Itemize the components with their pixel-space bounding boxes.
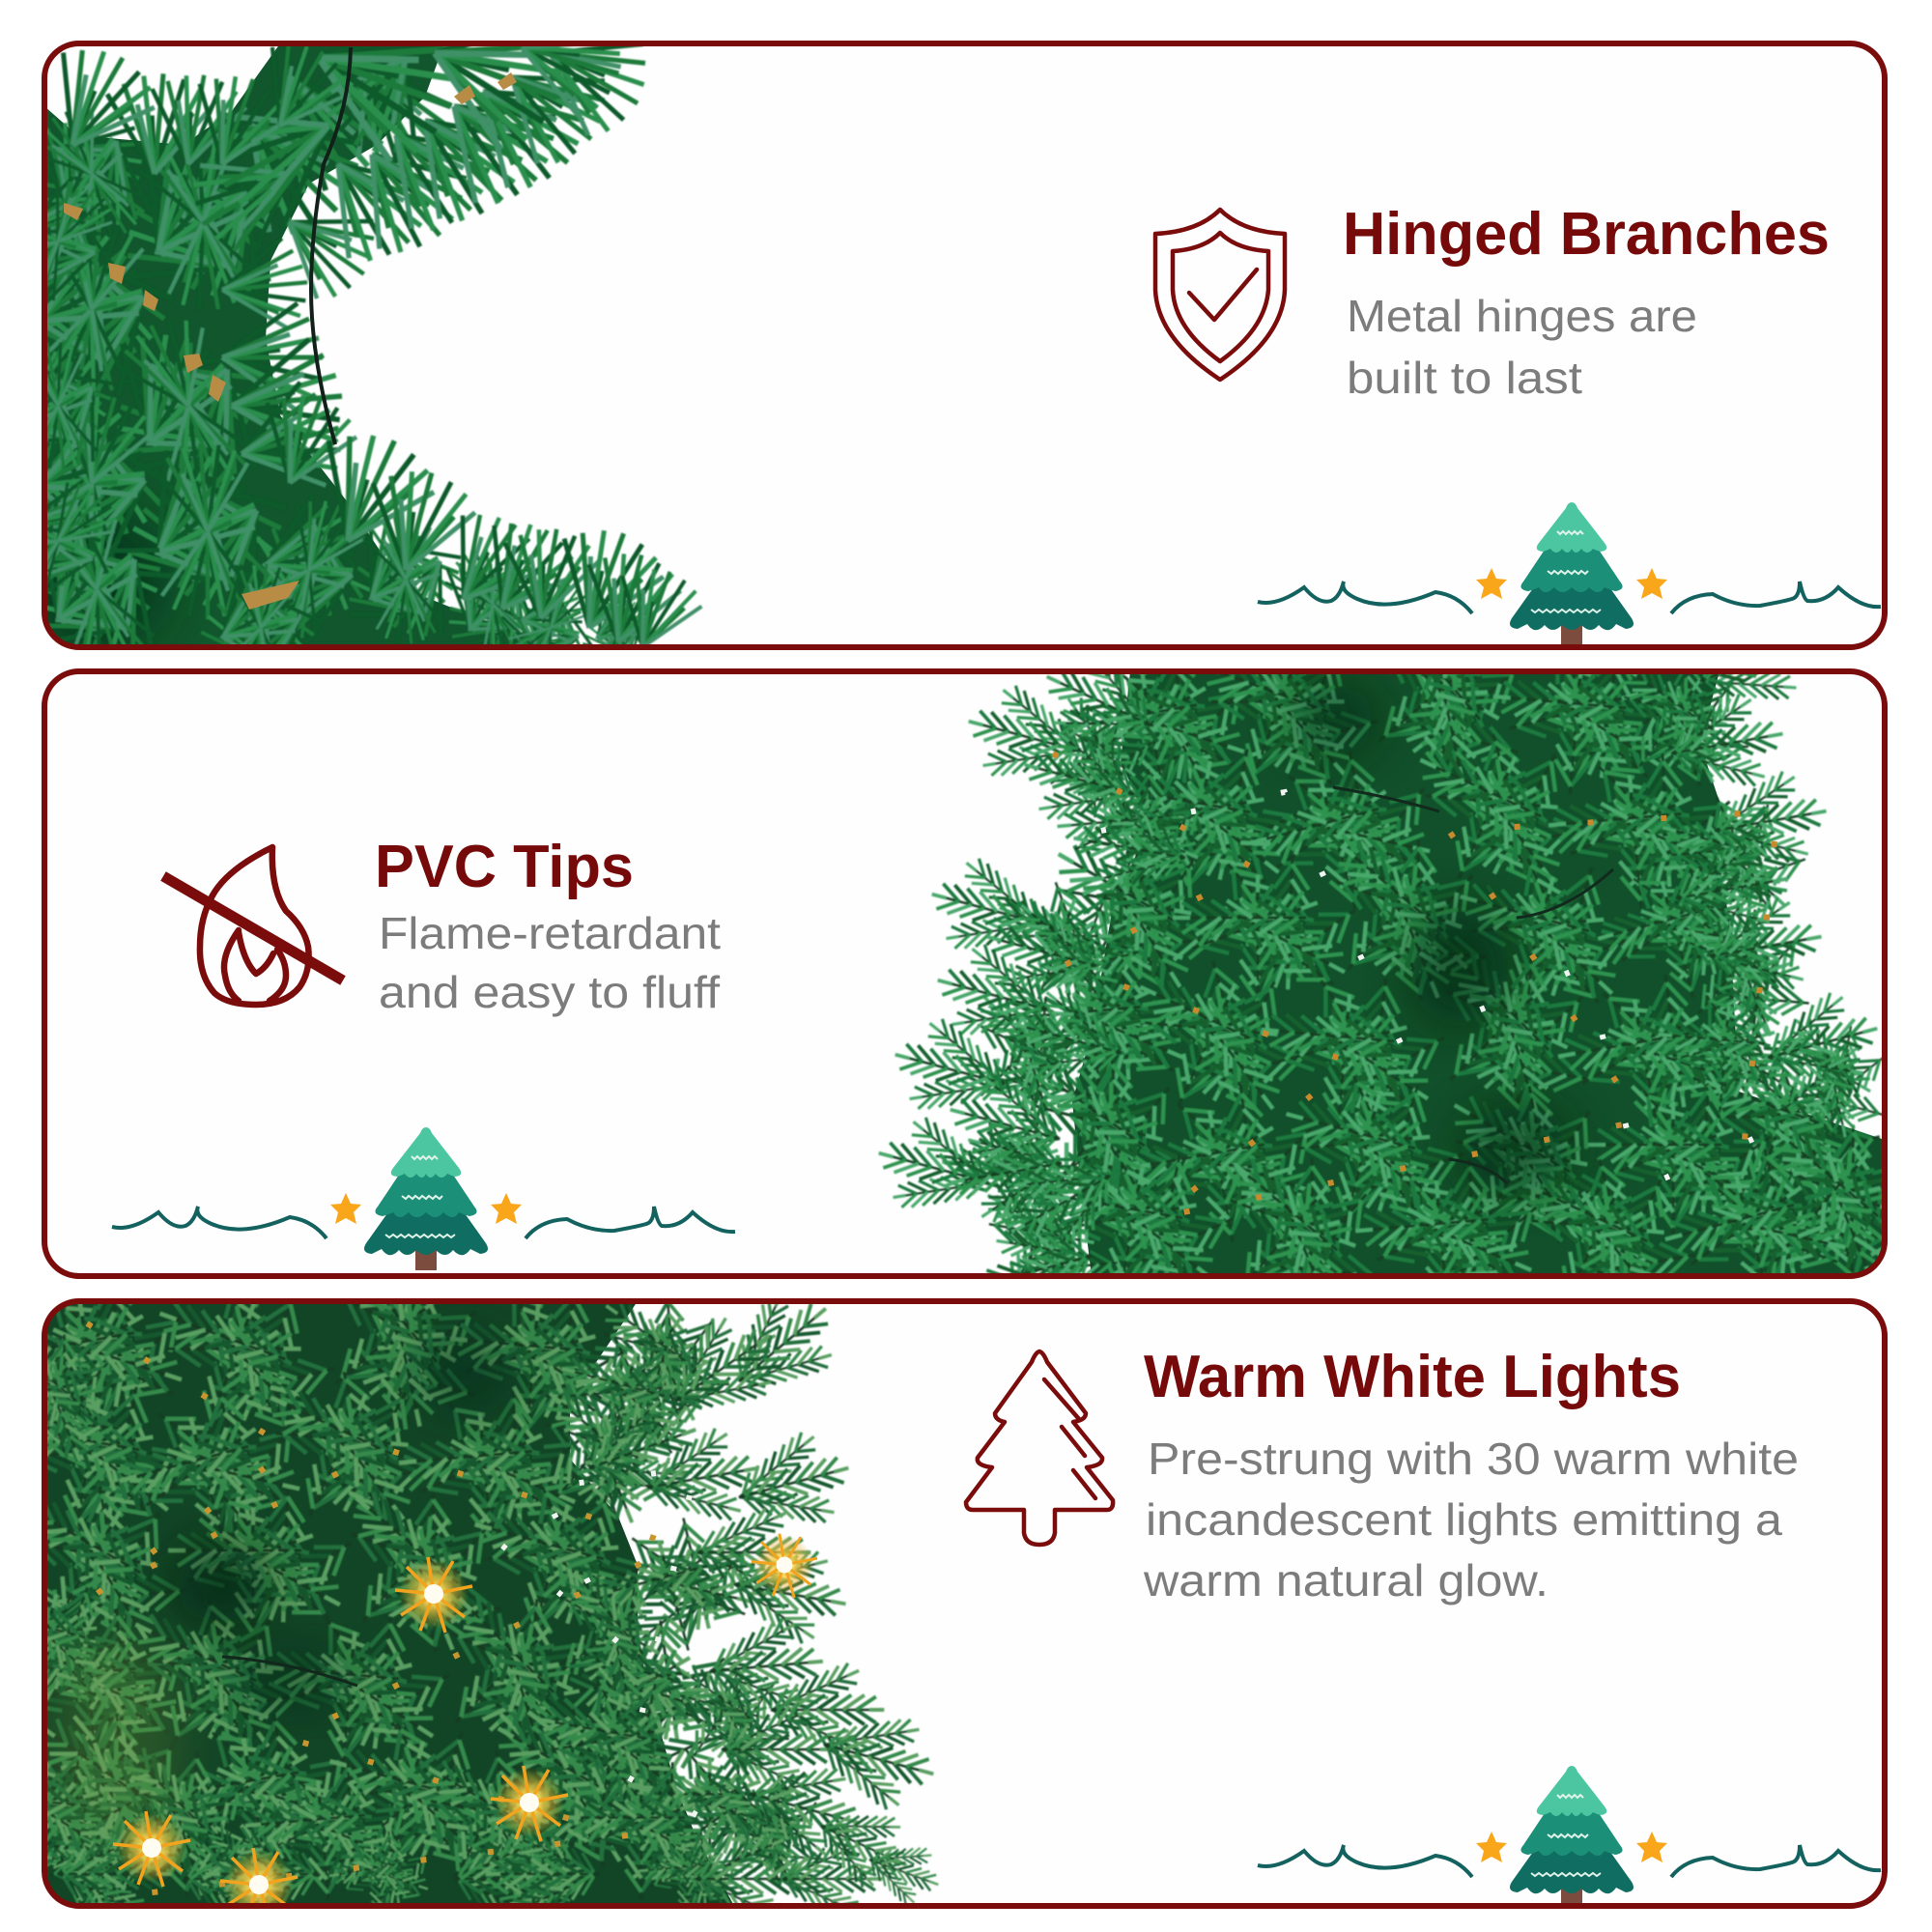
body text [1347,291,1697,403]
body text [1143,1434,1799,1605]
heading: Warm White Lights [1144,1344,1681,1410]
heading: PVC Tips [375,834,634,900]
icon: tree outline [966,1351,1113,1545]
body text: Pre-strung with 30 warm white [1148,1434,1799,1484]
panel: PVC tips [112,674,1882,1273]
body text: built to last [1347,353,1582,403]
body text [379,908,721,1017]
photo: spruce tree [877,674,1882,1273]
body text: warm natural glow. [1143,1555,1548,1605]
photo: pine branches [47,46,703,644]
lights [113,1534,817,1923]
panel: hinged branches [47,46,1882,644]
icon: no flame [163,847,343,1005]
decoration: tree, stars and garland [1258,1766,1881,1909]
icon: shield with check [1155,210,1285,380]
decoration: tree, stars and garland [1258,502,1881,645]
body text: incandescent lights emitting a [1146,1494,1782,1545]
body text: Metal hinges are [1347,291,1697,341]
body text: and easy to fluff [379,967,720,1017]
panel: warm white lights [47,1304,1882,1903]
decoration: tree, stars and garland [112,1127,735,1270]
body text: Flame-retardant [379,908,721,958]
photo: lit tree [47,1304,939,1903]
heading: Hinged Branches [1343,201,1830,268]
